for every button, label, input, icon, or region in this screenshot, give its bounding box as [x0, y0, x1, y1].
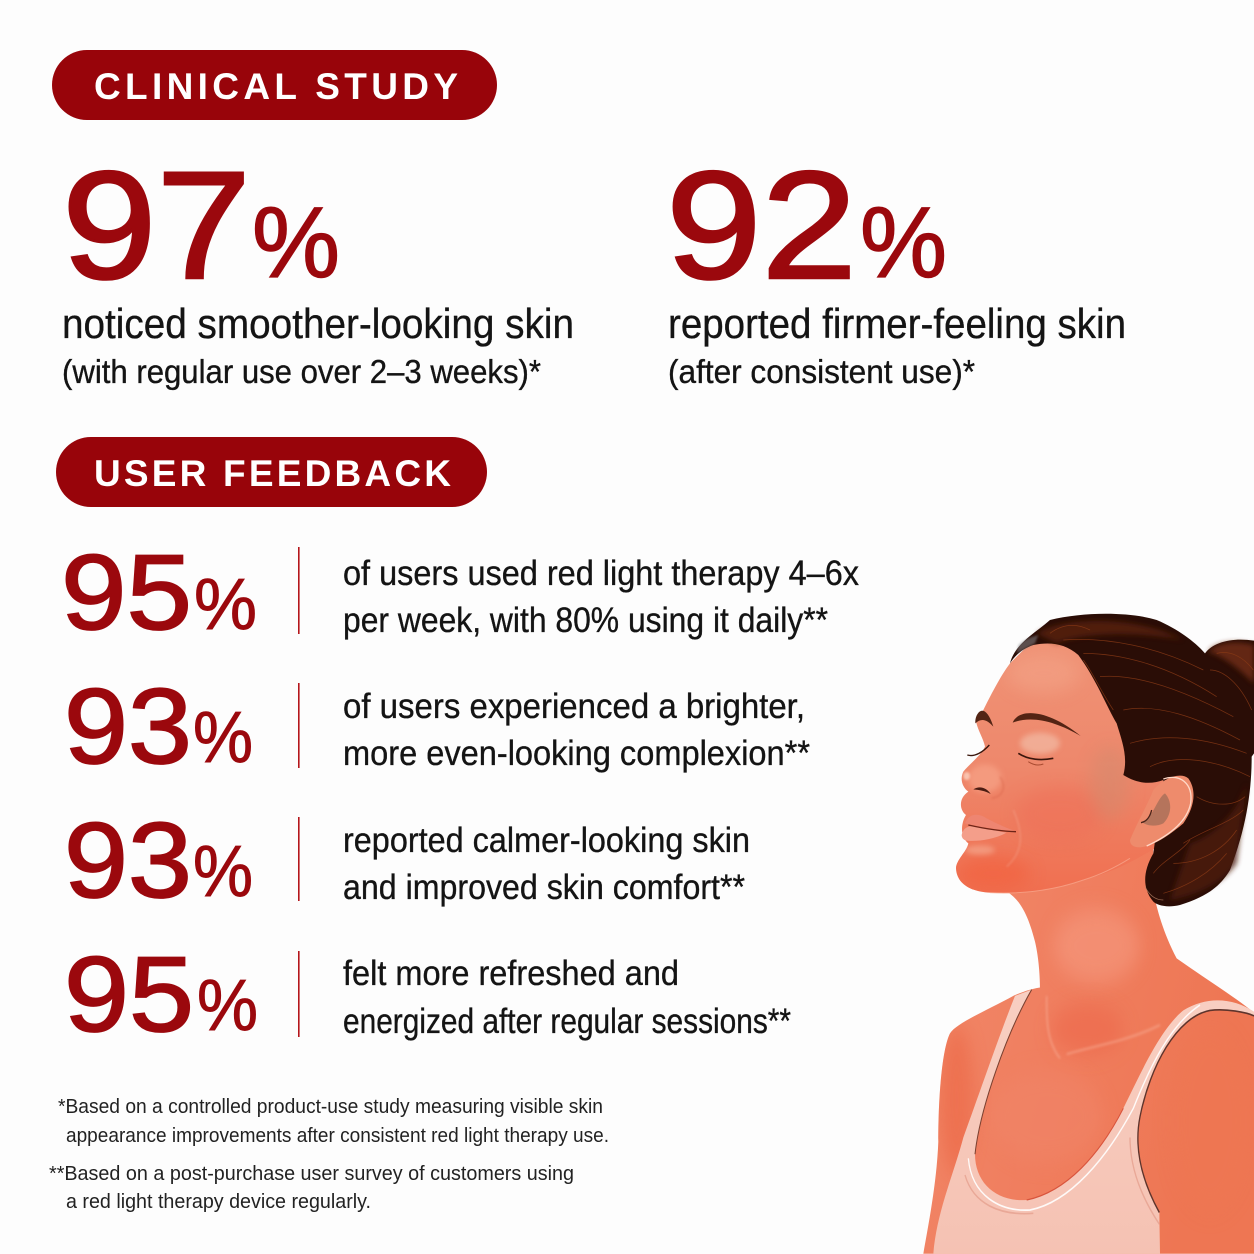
feedback row: 95% refreshed: [64, 934, 791, 1054]
body: neck, shoulders and tank top: [923, 849, 1254, 1254]
nose: [963, 772, 1003, 798]
stat: 97% smoother-looking skin: noticed smoother-looking skin: [62, 300, 574, 347]
eyebrows: [975, 711, 1081, 736]
feedback row: 93% calmer skin: %: [193, 832, 253, 912]
stat: 97% smoother-looking skin: (with regular use over 2–3 weeks)*: [62, 353, 541, 390]
heading pill: user feedback: USER FEEDBACK: [94, 453, 451, 494]
feedback row: 93% complexion: [64, 666, 810, 786]
feedback row: 95% refreshed: %: [197, 966, 258, 1046]
hair: [1010, 614, 1254, 906]
ear: [1130, 776, 1194, 847]
stat: 97% smoother-looking skin: [62, 140, 574, 390]
feedback row: 93% complexion: of users experienced a brighter,: [343, 687, 805, 726]
feedback row: 93% complexion: more even-looking complexion**: [343, 734, 810, 773]
face skin: [956, 637, 1163, 893]
heading pill: clinical study: [52, 50, 497, 120]
hair strands: [1050, 625, 1253, 900]
heading pill: user feedback: [56, 437, 487, 507]
footnotes: *Based on a controlled product-use study measuring visible skin: [58, 1096, 603, 1118]
stat: 92% firmer-feeling skin: [666, 140, 1126, 390]
feedback row: 95% usage: 95: [61, 532, 192, 652]
stat: 92% firmer-feeling skin: reported firmer-feeling skin: [668, 300, 1126, 347]
stat: 92% firmer-feeling skin: 92: [666, 140, 857, 311]
feedback row: 93% calmer skin: and improved skin comfort**: [343, 868, 745, 907]
stat: 97% smoother-looking skin: 97: [62, 140, 251, 311]
feedback row: 93% complexion: %: [193, 698, 253, 778]
hair colour variation: [1017, 621, 1254, 900]
jaw line: [990, 858, 1130, 893]
feedback row: 95% refreshed: 95: [64, 934, 194, 1054]
feedback row: 95% usage: of users used red light therapy 4–6x: [343, 554, 859, 593]
feedback row: 95% refreshed: energized after regular sessions**: [343, 1002, 791, 1041]
feedback row: 93% complexion: 93: [64, 666, 192, 786]
stat: 92% firmer-feeling skin: (after consistent use)*: [668, 353, 975, 390]
feedback row: 93% calmer skin: reported calmer-looking skin: [343, 821, 750, 860]
heading pill: clinical study: CLINICAL STUDY: [94, 66, 458, 107]
stat: 92% firmer-feeling skin: %: [860, 187, 947, 299]
lips: [962, 815, 1016, 841]
footnotes: **Based on a post-purchase user survey of customers using: [49, 1163, 574, 1185]
feedback row: 95% usage: [61, 532, 859, 652]
feedback row: 95% refreshed: felt more refreshed and: [343, 954, 679, 993]
head: face, hair and ear: [956, 614, 1254, 906]
footnotes: a red light therapy device regularly.: [66, 1191, 371, 1213]
closed eyes and lids: [967, 745, 1053, 765]
portrait: woman with closed eyes: [923, 614, 1254, 1254]
face shading: [957, 653, 1130, 890]
footnotes: [49, 1096, 609, 1213]
feedback row: 93% calmer skin: 93: [64, 800, 192, 920]
stat: 97% smoother-looking skin: %: [252, 187, 340, 299]
footnotes: appearance improvements after consistent red light therapy use.: [66, 1125, 609, 1147]
feedback row: 95% usage: per week, with 80% using it daily**: [343, 601, 828, 640]
feedback row: 95% usage: %: [194, 565, 257, 645]
feedback row: 93% calmer skin: [64, 800, 750, 920]
